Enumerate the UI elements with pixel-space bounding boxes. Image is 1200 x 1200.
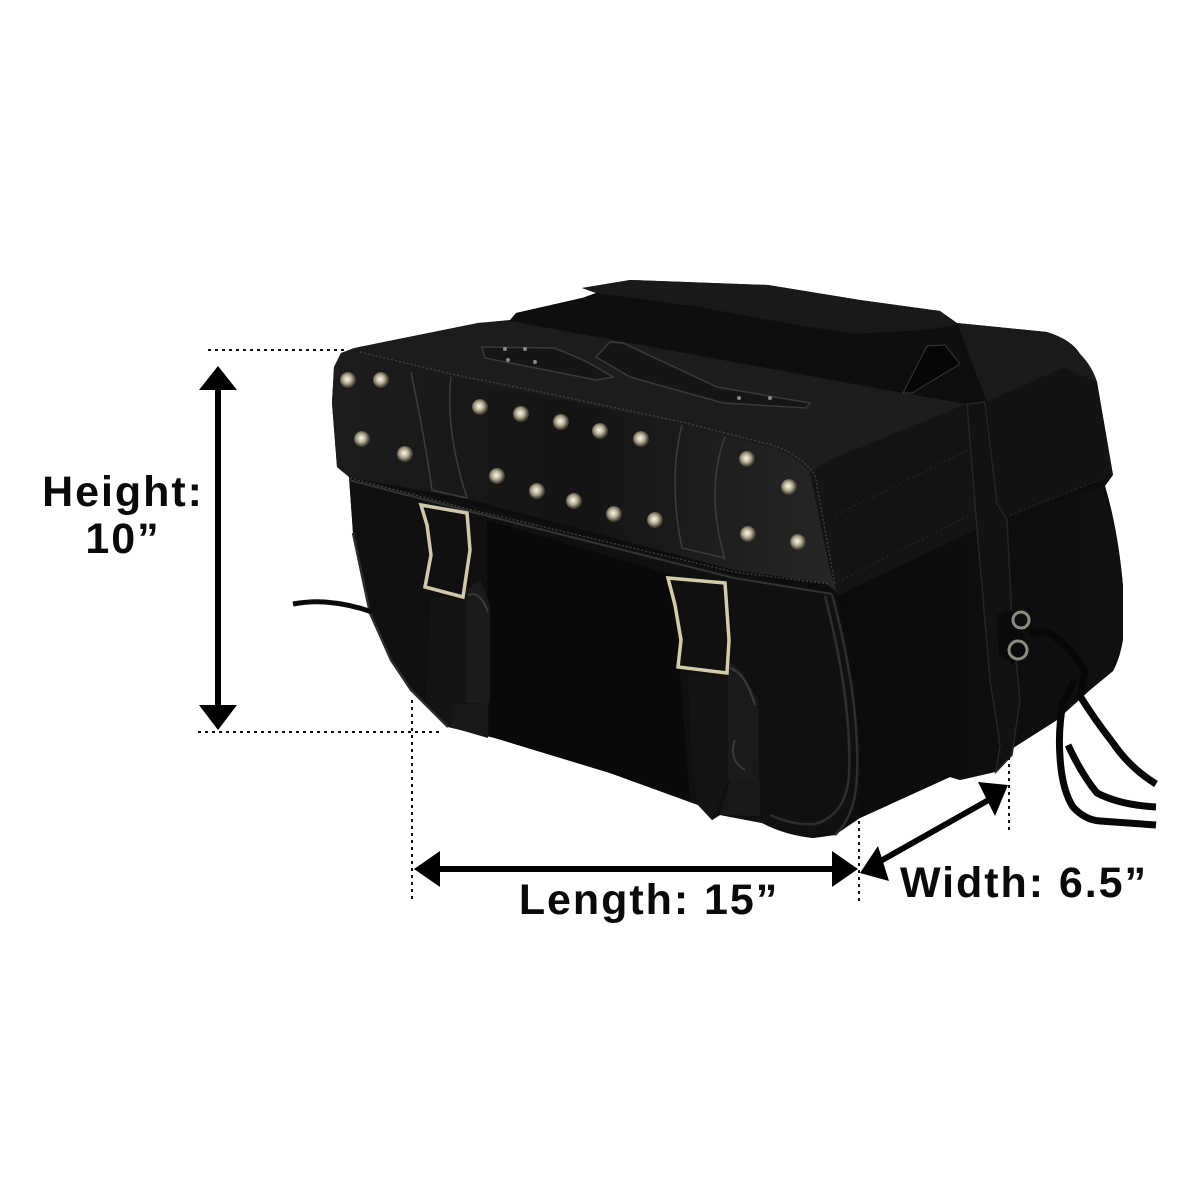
- drawstring laces: [1030, 632, 1156, 825]
- rear corner straps: [903, 345, 960, 393]
- length label: Length: 15”: [519, 876, 779, 924]
- lid band with studs: [332, 348, 837, 592]
- band strap seams: [411, 372, 725, 560]
- left cord: [293, 602, 372, 612]
- height dotted guides: [198, 350, 442, 732]
- band stitching: [350, 352, 835, 585]
- d-ring hardware: [997, 610, 1029, 664]
- height dimension: [42, 350, 442, 732]
- front body: [349, 477, 857, 838]
- height arrow: [199, 366, 237, 730]
- width dimension: [860, 715, 1148, 907]
- top handle strap right: [596, 342, 810, 408]
- product photo: black leather saddlebag: [293, 280, 1156, 838]
- height label: Height:: [42, 468, 204, 516]
- length arrow: [414, 851, 858, 887]
- bag piping edge: [353, 533, 857, 835]
- rear compartment top: [510, 298, 987, 402]
- length dotted guides: [412, 700, 859, 902]
- right strap and buckle: [668, 578, 760, 820]
- lower side panel: [837, 486, 1123, 818]
- width label: Width: 6.5”: [900, 859, 1148, 907]
- left strap and buckle: [421, 505, 490, 738]
- rear side lid: [987, 368, 1113, 518]
- lid lower edge highlight: [349, 480, 832, 594]
- top handle strap left: [482, 347, 613, 380]
- right lid panel: [810, 404, 977, 596]
- width arrow: [860, 782, 1008, 881]
- length dimension: [412, 700, 859, 924]
- side seam strip: [967, 402, 1020, 772]
- bag silhouette: [332, 280, 1123, 838]
- metal studs: [340, 372, 806, 550]
- top surface: [354, 321, 967, 473]
- rear flap: [582, 280, 957, 334]
- right lid stitching: [836, 450, 1105, 580]
- width dotted guide: [1008, 715, 1010, 830]
- height dimension: 10”: [85, 515, 161, 563]
- centre recessed panel: [487, 520, 690, 800]
- rear top facet: [957, 323, 1097, 402]
